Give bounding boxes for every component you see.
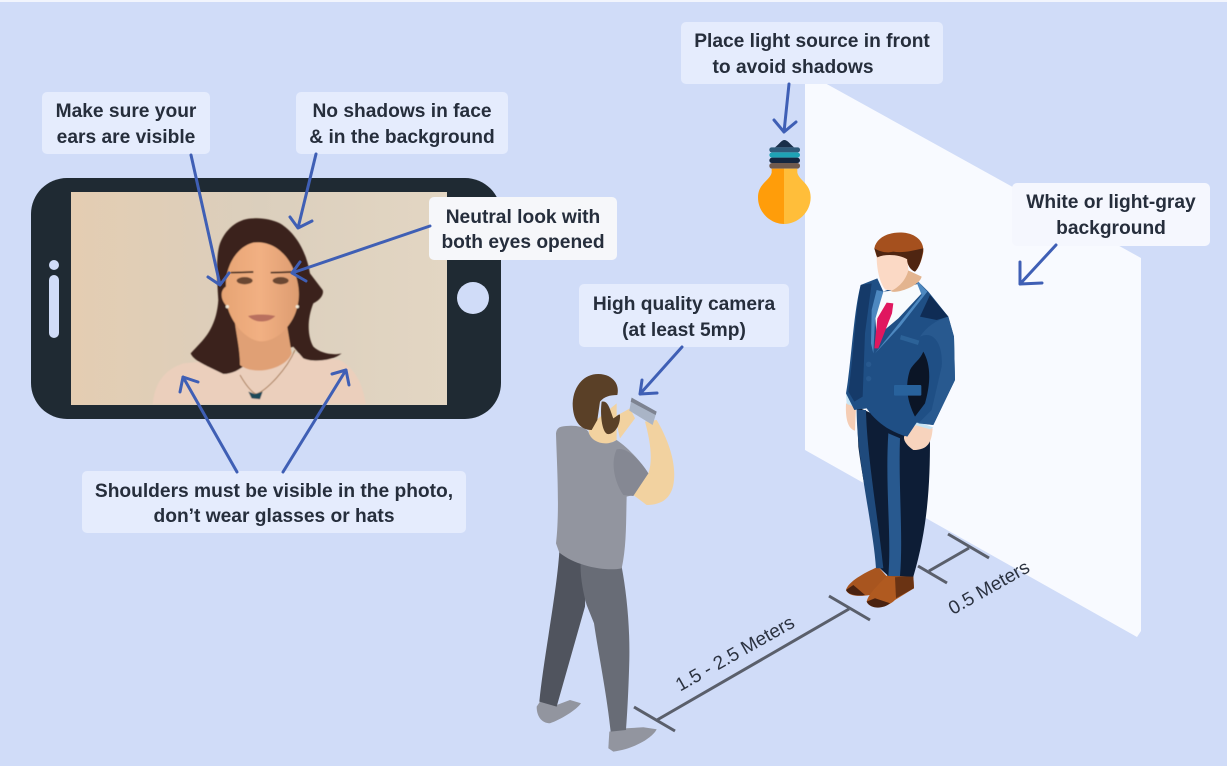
label: ears: [42, 92, 210, 154]
label: ears: ears are visible: [57, 127, 196, 148]
label: shoulders: [82, 471, 466, 533]
arrow: wall: [1020, 245, 1056, 284]
neck: [588, 403, 617, 447]
hands: [846, 403, 856, 431]
dimension: 0.5 meters: [918, 534, 1034, 619]
photo of woman: [71, 192, 447, 405]
icon: light bulb: [758, 140, 811, 224]
torso: [556, 426, 648, 569]
arrow: neutral look: [292, 226, 430, 281]
panel: white background wall: [805, 72, 1141, 637]
trousers: [857, 407, 930, 577]
label: shadows: & in the background: [309, 127, 495, 148]
label: camera: [579, 284, 789, 347]
person photographing: [537, 374, 674, 752]
arrow: camera: [640, 347, 682, 394]
far leg and shoe: [537, 700, 581, 723]
label: ears: Make sure your: [56, 101, 197, 122]
icon: speaker dot and slot: [49, 260, 59, 338]
label: neutral look: [429, 197, 617, 260]
label: wall background: [1012, 183, 1210, 246]
label: wall background: background: [1056, 218, 1166, 239]
man in suit: [846, 233, 955, 608]
label: shoulders: Shoulders must be visible in the photo,: [95, 481, 453, 502]
shoes: [846, 567, 888, 596]
near leg and shoe: [608, 727, 657, 752]
icon: home button: [457, 282, 489, 314]
phone in hand: [629, 398, 657, 425]
neck and head: [890, 270, 922, 292]
label: light source: [681, 22, 943, 84]
label: neutral look: Neutral look with: [446, 207, 600, 228]
dimension: 1.5 - 2.5 meters: 1.5 - 2.5 Meters: [672, 612, 798, 696]
label: camera: (at least 5mp): [622, 320, 746, 341]
jacket: [846, 278, 955, 437]
far arm: [615, 408, 635, 438]
shirt and tie: [875, 283, 923, 337]
dimension: 0.5 meters: 0.5 Meters: [945, 557, 1034, 619]
label: shadows: [296, 92, 508, 154]
phone: [31, 178, 501, 419]
arrow: ears: [191, 155, 229, 285]
label: neutral look: both eyes opened: [441, 232, 605, 253]
dimension: 1.5 - 2.5 meters: [634, 596, 870, 731]
arrow: shadows: [290, 154, 316, 228]
hair and beard: [573, 374, 618, 430]
label: light source: to avoid shadows: [712, 57, 874, 78]
arrow: light source: [774, 84, 796, 132]
shirt cuffs: [846, 394, 933, 429]
arrow: left shoulder: [180, 377, 237, 472]
label: light source: Place light source in front: [694, 31, 930, 52]
label: camera: High quality camera: [593, 294, 775, 315]
arrow: right shoulder: [283, 370, 349, 472]
label: shoulders: don’t wear glasses or hats: [154, 506, 394, 527]
label: wall background: White or light-gray: [1026, 192, 1196, 213]
label: shadows: No shadows in face: [312, 101, 492, 122]
